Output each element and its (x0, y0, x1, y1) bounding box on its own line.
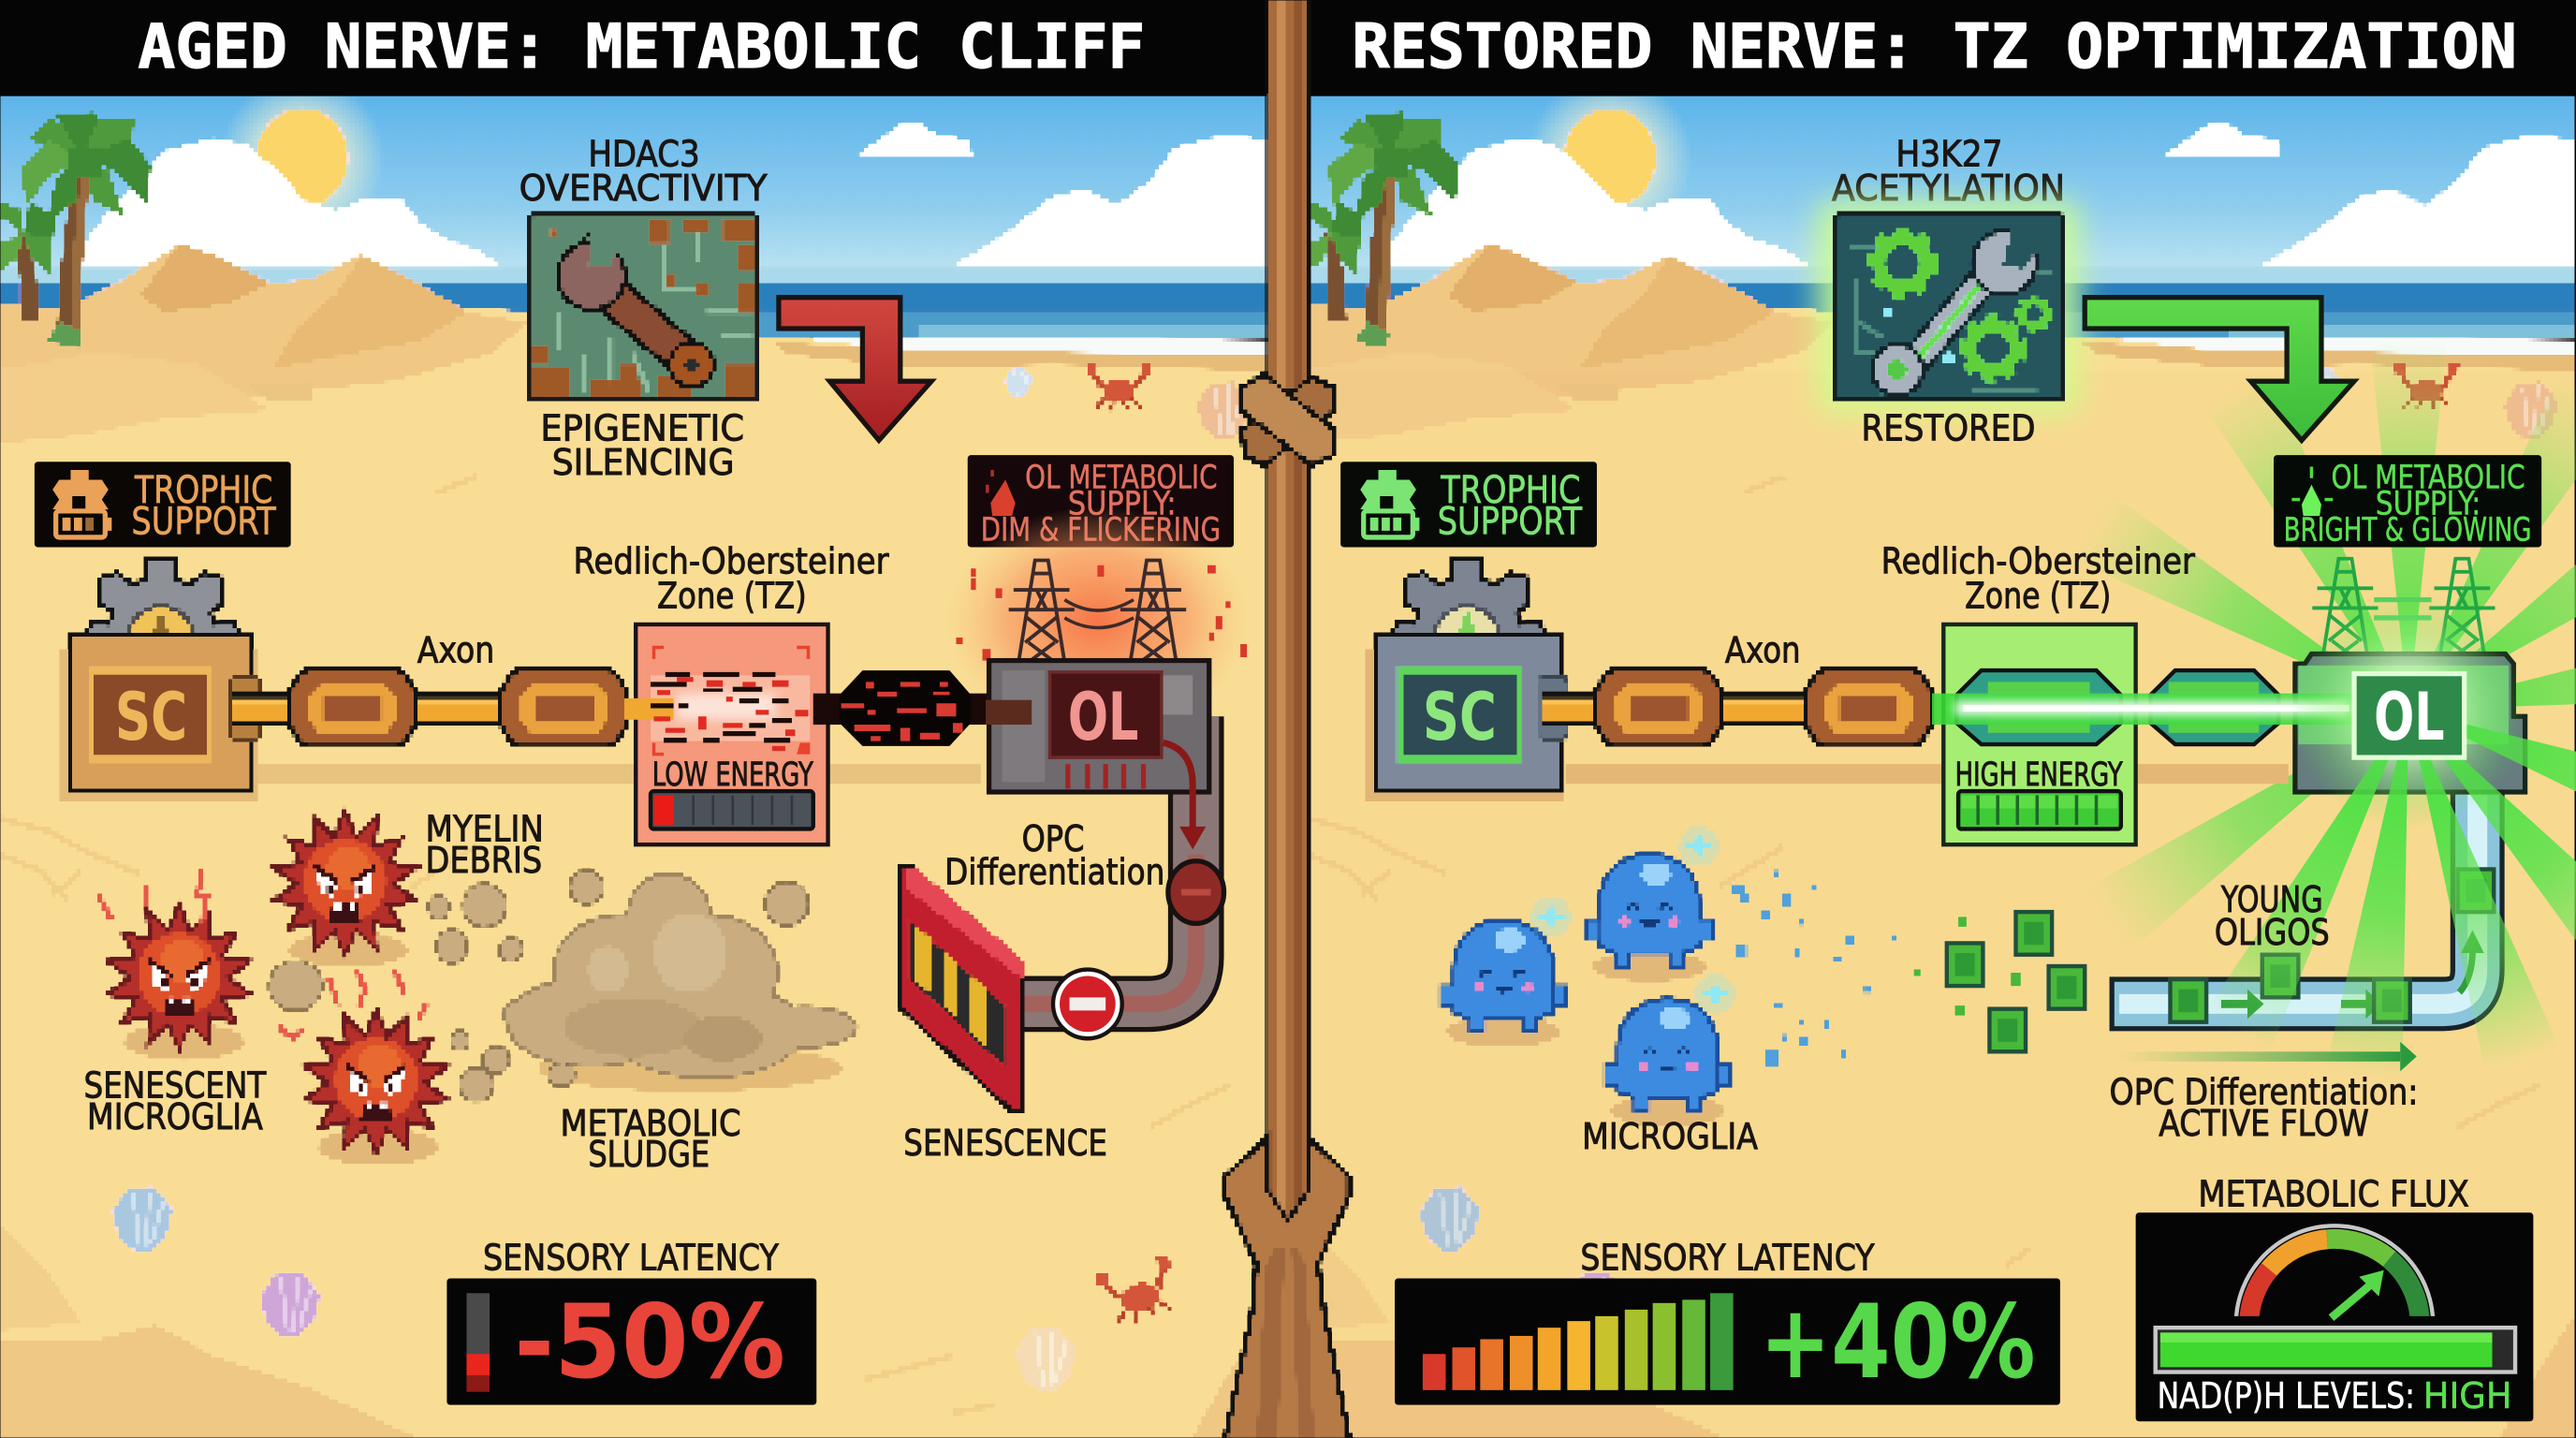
readout: metabolic flux gauge (2136, 1173, 2533, 1421)
callout: trophic support: TROPHIC (1440, 468, 1580, 512)
readout: sensory latency +40%: +40% (1760, 1283, 2036, 1401)
label: Redlich-Obersteiner zone (574, 541, 889, 617)
label: HDAC3 overactivity: HDAC3 (588, 133, 700, 175)
readout: sensory latency -50%: SENSORY LATENCY (483, 1238, 779, 1280)
label: epigenetic silencing: SILENCING (552, 442, 735, 484)
label: senescent microglia (84, 1064, 267, 1138)
arrow: green elbow down (2085, 298, 2354, 440)
panel: restored nerve (1310, 0, 2576, 1421)
readout: metabolic flux gauge: NAD(P)H LEVELS: (2157, 1375, 2415, 1417)
blocked OPC pipe (1022, 716, 1224, 1038)
OL chip: glowing: OL (2374, 679, 2445, 756)
label: senescence: SENESCENCE (903, 1123, 1107, 1165)
label: Redlich-Obersteiner zone: Redlich-Obersteiner (574, 541, 889, 583)
label: axon: Axon (417, 629, 494, 671)
label: H3K27 acetylation (1832, 133, 2065, 210)
icon: rusty wrench on circuit board (529, 215, 757, 400)
readout: sensory latency +40% (1395, 1238, 2060, 1405)
icon: stop sign (1053, 970, 1122, 1038)
title: restored nerve (1310, 0, 2576, 96)
senescent microglia group (98, 812, 446, 1165)
label: myelin debris (426, 809, 544, 882)
Schwann cell SC (61, 561, 259, 802)
active OPC pipe with young oligos (2110, 772, 2494, 1022)
label: epigenetic silencing: EPIGENETIC (540, 407, 744, 449)
rope knot (1242, 374, 1334, 465)
label: metabolic sludge: METABOLIC (560, 1103, 741, 1145)
label: microglia: MICROGLIA (1582, 1116, 1758, 1158)
right beach background (1308, 76, 2576, 1438)
healthy axon segment (1541, 670, 1936, 746)
glowing beam through myelin (1932, 670, 2359, 744)
TZ panel: low energy: LOW ENERGY (652, 756, 813, 794)
arrow: active flow (2117, 1042, 2417, 1071)
readout: metabolic flux gauge: HIGH (2423, 1375, 2512, 1417)
TZ panel: high energy: HIGH ENERGY (1955, 756, 2123, 794)
callout: OL metabolic supply dim and flickering: OL METABOLIC (1025, 458, 1218, 496)
icon: glowing wrench and gears (1817, 200, 2080, 414)
sand shadow under pathway (1566, 764, 2289, 784)
label: OPC differentiation: Differentiation (944, 851, 1164, 893)
label: Redlich-Obersteiner zone: Zone (TZ) (1965, 575, 2111, 617)
label: OPC differentiation active flow (2110, 1071, 2419, 1145)
title: restored nerve: RESTORED NERVE: TZ OPTIMIZATION (1352, 12, 2517, 82)
healthy microglia group (1441, 827, 1897, 1125)
callout: trophic support: SUPPORT (1438, 499, 1582, 543)
metabolic sludge cloud (270, 871, 857, 1101)
TZ panel: low energy (624, 624, 828, 844)
callout: OL metabolic supply dim and flickering: SUPPLY: (1068, 484, 1177, 522)
readout: sensory latency +40%: SENSORY LATENCY (1580, 1238, 1875, 1280)
callout: OL metabolic supply bright and glowing: OL METABOLIC (2331, 458, 2525, 496)
rope divider (1225, 0, 1349, 1438)
TZ panel: high energy (1943, 624, 2136, 844)
healthy axon segment (233, 670, 627, 746)
label: axon: Axon (1725, 629, 1801, 671)
left beach background (0, 76, 1266, 1438)
readout: sensory latency -50%: -50% (514, 1283, 785, 1401)
valve (1168, 861, 1224, 923)
Schwann cell SC: SC (115, 679, 187, 756)
power station OL: dim red: OL (1068, 679, 1138, 756)
callout: OL metabolic supply dim and flickering (968, 455, 1234, 549)
label: Redlich-Obersteiner zone: Redlich-Obersteiner (1881, 541, 2195, 583)
sand shadow under pathway (258, 764, 981, 784)
power station OL: bright green (2295, 559, 2525, 792)
callout: trophic support (35, 462, 291, 547)
readout: sensory latency -50% (446, 1238, 816, 1405)
label: HDAC3 overactivity (520, 133, 768, 210)
label: restored: RESTORED (1862, 407, 2036, 449)
green light rays (2049, 317, 2576, 1104)
label: OPC differentiation (944, 818, 1164, 893)
label: metabolic sludge (560, 1103, 741, 1176)
label: epigenetic silencing (540, 407, 744, 484)
label: HDAC3 overactivity: OVERACTIVITY (520, 168, 768, 210)
readout: metabolic flux gauge: METABOLIC FLUX (2198, 1173, 2469, 1215)
label: OPC differentiation active flow: ACTIVE FLOW (2159, 1103, 2369, 1145)
Schwann cell SC: SC (1423, 679, 1497, 756)
arrow: red elbow down (779, 298, 931, 440)
label: H3K27 acetylation: ACETYLATION (1832, 168, 2065, 210)
title: aged nerve (0, 0, 1266, 96)
power station OL: dim red (946, 506, 1249, 849)
label: young oligos: YOUNG (2220, 879, 2323, 921)
label: young oligos: OLIGOS (2215, 912, 2330, 954)
callout: OL metabolic supply bright and glowing: SUPPLY: (2376, 484, 2481, 522)
callout: OL metabolic supply dim and flickering: DIM & FLICKERING (981, 510, 1221, 549)
OL chip: glowing (2188, 592, 2576, 1104)
rope frayed base (1225, 1137, 1349, 1438)
label: H3K27 acetylation: H3K27 (1895, 133, 2002, 175)
label: metabolic sludge: SLUDGE (588, 1134, 710, 1176)
Schwann cell SC (1367, 561, 1567, 802)
label: senescent microglia: SENESCENT (84, 1064, 267, 1107)
glitched myelin node (813, 670, 997, 746)
label: Redlich-Obersteiner zone (1881, 541, 2195, 617)
young oligodendrocyte cubes (1914, 912, 2085, 1051)
label: myelin debris: DEBRIS (426, 840, 542, 882)
panel: aged nerve (0, 0, 1266, 1405)
callout: trophic support (1340, 462, 1597, 547)
label: OPC differentiation active flow: OPC Differentiation: (2110, 1071, 2419, 1113)
label: OPC differentiation: OPC (1022, 818, 1084, 860)
callout: OL metabolic supply bright and glowing (2274, 455, 2541, 549)
label: young oligos (2215, 879, 2330, 954)
senescence barrier (899, 866, 1023, 1110)
label: Redlich-Obersteiner zone: Zone (TZ) (657, 575, 807, 617)
callout: trophic support: TROPHIC (134, 468, 272, 512)
label: senescent microglia: MICROGLIA (87, 1096, 263, 1138)
title: aged nerve: AGED NERVE: METABOLIC CLIFF (138, 12, 1145, 82)
callout: trophic support: SUPPORT (131, 499, 276, 543)
label: myelin debris: MYELIN (426, 809, 544, 851)
